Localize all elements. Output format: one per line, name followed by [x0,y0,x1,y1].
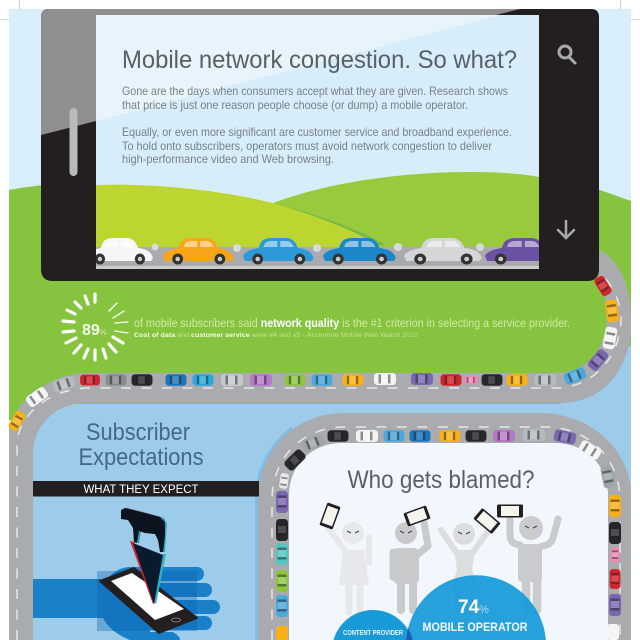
illustration: hand holding phone with cow [33,508,220,640]
intro text: Equally, or even more significant are customer service and broadband experience. [122,125,512,139]
icon: search [559,46,575,63]
cow on wedge [121,508,167,604]
cars on lower road [276,429,621,640]
phone screen [86,15,561,269]
bubble: mobile operator: MOBILE OPERATOR [422,620,528,634]
intro text: Gone are the days when consumers accept what they are given. Research shows [122,84,508,98]
bubble: content provider: CONTENT PROVIDER [343,628,404,637]
scroll bar [70,108,78,176]
angry people with phones [319,502,558,612]
phone body [41,9,599,281]
bubble: content provider [334,610,412,640]
heading: subscriber expectations [78,419,204,471]
hand [33,567,220,640]
heading: who gets blamed: Who gets blamed? [348,466,534,494]
intro text: To hold onto subscribers, operators must avoid network congestion to deliver [122,139,492,153]
intro text: high-performance video and Web browsing. [122,152,334,166]
stat: 89% radial gauge: 89% [82,322,107,339]
person 1 [328,522,369,612]
stat text: Cost of data and customer service were #4 and #5 - Accenture Mobile Web Watch 2012 [134,332,418,339]
icon: down arrow [558,221,574,238]
stat text [134,316,570,339]
screen cars [86,238,561,264]
banner: what they expect: WHAT THEY EXPECT [84,484,198,496]
stat: 89% radial gauge [63,294,128,360]
person 3 [441,523,489,610]
bubble: mobile operator [406,575,546,640]
crop marks [0,0,640,20]
road: upper loop [9,250,631,640]
intro text [122,84,512,166]
intro text: that price is just one reason people choose (or dump) a mobile operator. [122,98,468,112]
person 4 [510,516,558,610]
angry faces [347,526,537,534]
person 2 [393,522,428,610]
heading: subscriber expectations: Subscriber [86,419,190,446]
handheld phones [319,502,523,534]
heading: subscriber expectations: Expectations [78,444,204,471]
panel: who gets blamed background [289,443,608,640]
stat text: of mobile subscribers said network quality is the #1 criterion in selecting a service provider. [134,316,570,330]
bubble: mobile operator: 74% [458,597,489,618]
banner: what they expect [33,481,259,496]
cars on upper road [7,275,619,432]
title: Mobile network congestion. So what? [122,46,517,74]
phone in hand [100,568,197,633]
road: lower loop [256,413,631,640]
